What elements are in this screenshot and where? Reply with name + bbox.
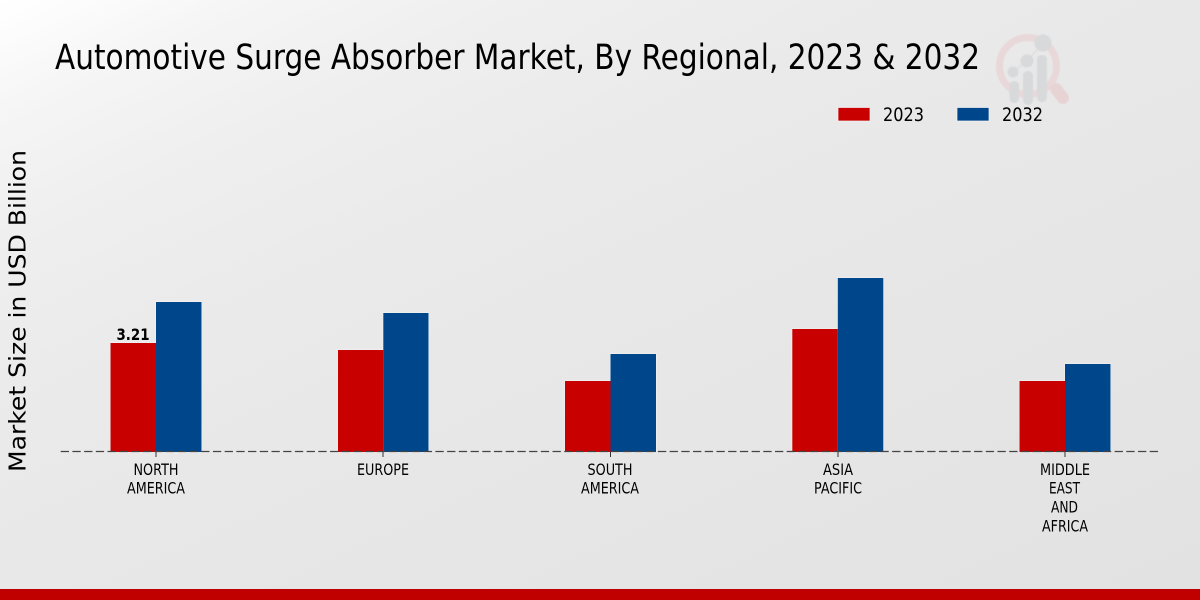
label: South America: AMERICA [581,478,639,498]
legend [838,104,1043,126]
bars: Middle East and Africa [1020,364,1110,452]
legend item: 2032 [957,104,1043,126]
label: South America [581,460,639,498]
bars: North America [110,302,202,452]
bars: Europe [338,313,428,452]
label: Middle East and Africa: MIDDLE [1040,460,1090,479]
label: North America: NORTH [134,460,178,479]
label: Middle East and Africa: AFRICA [1042,516,1088,536]
footer bar [0,589,1200,600]
legend item: 2023: 2023 [883,104,924,126]
title: Automotive Surge Absorber Market, By Regional, 2023 & 2032 [55,38,980,78]
label: Middle East and Africa: AND [1051,498,1078,516]
bars: South America [565,354,656,452]
x axis labels [127,460,1090,536]
label: Middle East and Africa: EAST [1049,478,1080,498]
bar chart [61,278,1159,457]
icon: watermark logo [1000,34,1063,105]
label: North America: AMERICA [127,478,185,498]
value label: 3.21: 3.21 [116,325,150,344]
label: Asia Pacific [814,460,862,498]
bars: Asia Pacific [792,278,883,452]
y axis label: Market Size in USD Billion [6,150,32,472]
label: Asia Pacific: PACIFIC [814,478,862,498]
label: Middle East and Africa [1040,460,1090,536]
legend item: 2023 [838,104,924,126]
legend item: 2032: 2032 [1002,104,1043,126]
label: South America: SOUTH [588,460,632,479]
label: Europe: EUROPE [357,460,409,479]
label: North America [127,460,185,498]
label: Asia Pacific: ASIA [823,460,853,479]
